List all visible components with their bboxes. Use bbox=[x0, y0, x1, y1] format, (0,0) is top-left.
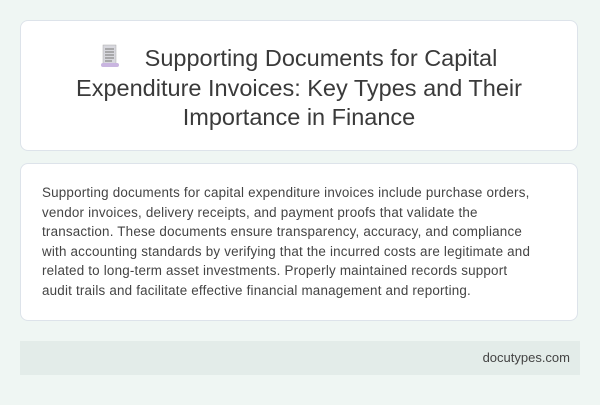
text block: vendor invoices, delivery receipts, and payment proofs that validate the bbox=[42, 204, 478, 220]
text block: related to long-term asset investments. Properly maintained records support bbox=[42, 263, 507, 278]
text block: Supporting documents for capital expenditure invoices include purchase orders, bbox=[42, 185, 530, 200]
panel: description bbox=[20, 163, 578, 321]
text block: with accounting standards by verifying that the incurred costs are legitimate and bbox=[42, 244, 530, 258]
footer bbox=[20, 341, 580, 375]
text block: audit trails and facilitate effective financial management and reporting. bbox=[42, 282, 471, 298]
panel: title card bbox=[20, 20, 578, 151]
text block: transaction. These documents ensure transparency, accuracy, and compliance bbox=[42, 224, 522, 239]
text block bbox=[42, 185, 530, 298]
title: Supporting Documents for Capital Expenditure Invoices: Key Types and Their Importance in Finance bbox=[76, 45, 522, 130]
footer text: docutypes.com bbox=[483, 350, 570, 365]
icon: document bbox=[101, 44, 119, 67]
